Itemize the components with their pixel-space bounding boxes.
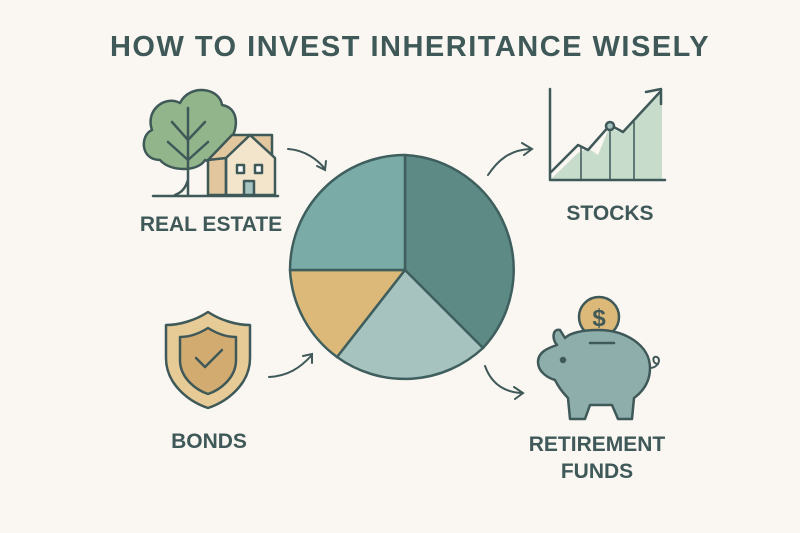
label: stocks: STOCKS [566, 202, 654, 225]
icon: piggy bank [538, 297, 659, 419]
icon: shield [166, 312, 250, 408]
arrow: real estate to pie [288, 149, 326, 170]
arrow: pie to stocks [488, 143, 532, 175]
icon: piggy bank: $ [592, 305, 606, 332]
pie chart [290, 155, 514, 379]
icon: tree and house [144, 90, 278, 196]
arrow: bonds to pie [269, 354, 312, 377]
arrow: pie to retirement [485, 366, 523, 399]
label: real estate: REAL ESTATE [140, 213, 282, 236]
label: bonds: BONDS [171, 430, 247, 453]
icon: stock chart [550, 89, 665, 180]
text: FUNDS [561, 460, 633, 483]
title: HOW TO INVEST INHERITANCE WISELY [110, 31, 710, 63]
label: retirement funds: RETIREMENT [529, 433, 665, 456]
